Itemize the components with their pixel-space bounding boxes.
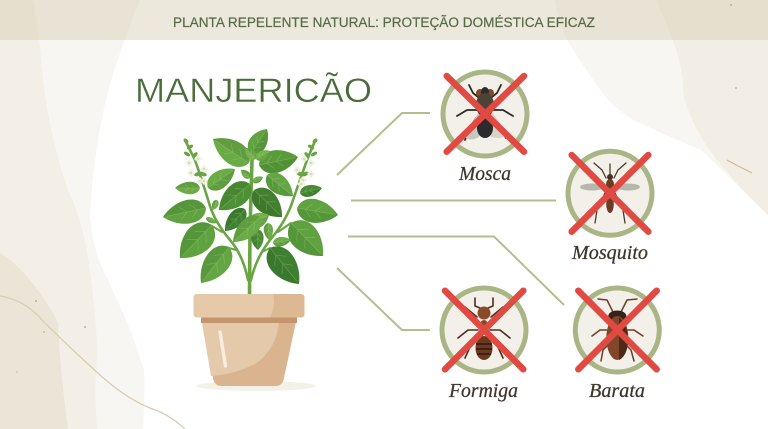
cross: [578, 291, 657, 369]
pot band: [201, 318, 297, 323]
pot body: [201, 317, 297, 386]
pot shadow: [196, 381, 316, 391]
background wash: right beige layer: [656, 0, 768, 215]
stems: [185, 140, 315, 294]
cross: [447, 76, 524, 152]
pot rim shade: [270, 294, 304, 318]
pot rim: [194, 294, 304, 318]
label: Mosca: Mosca: [458, 163, 511, 185]
label: Formiga: Formiga: [448, 380, 518, 402]
basil plant: [161, 124, 340, 294]
flower spikes: [183, 137, 318, 188]
label: Mosquito: Mosquito: [571, 242, 648, 264]
cross: [445, 291, 523, 369]
icon: mosquito: [568, 151, 652, 235]
cross: [572, 155, 648, 232]
label: Barata: Barata: [589, 380, 645, 402]
background wash: left dark layer: [0, 253, 68, 429]
icon: fly: [443, 72, 527, 156]
leaves: [161, 124, 340, 292]
terracotta pot: [194, 294, 304, 386]
header band: [0, 0, 768, 40]
connector lines: [337, 113, 564, 330]
pot body highlight: [201, 317, 279, 376]
background wash: left light layer: [0, 0, 144, 429]
icon: cockroach: [575, 288, 659, 372]
background curved line: [0, 296, 185, 429]
background wash: left beige layer: [0, 0, 97, 429]
icon: ant: [442, 288, 526, 372]
background wash: right light layer: [555, 0, 768, 215]
pot shine: [220, 332, 226, 366]
main title: MANJERICÃO: [135, 72, 372, 110]
header title: PLANTA REPELENTE NATURAL: PROTEÇÃO DOMÉSTICA EFICAZ: [173, 15, 595, 30]
